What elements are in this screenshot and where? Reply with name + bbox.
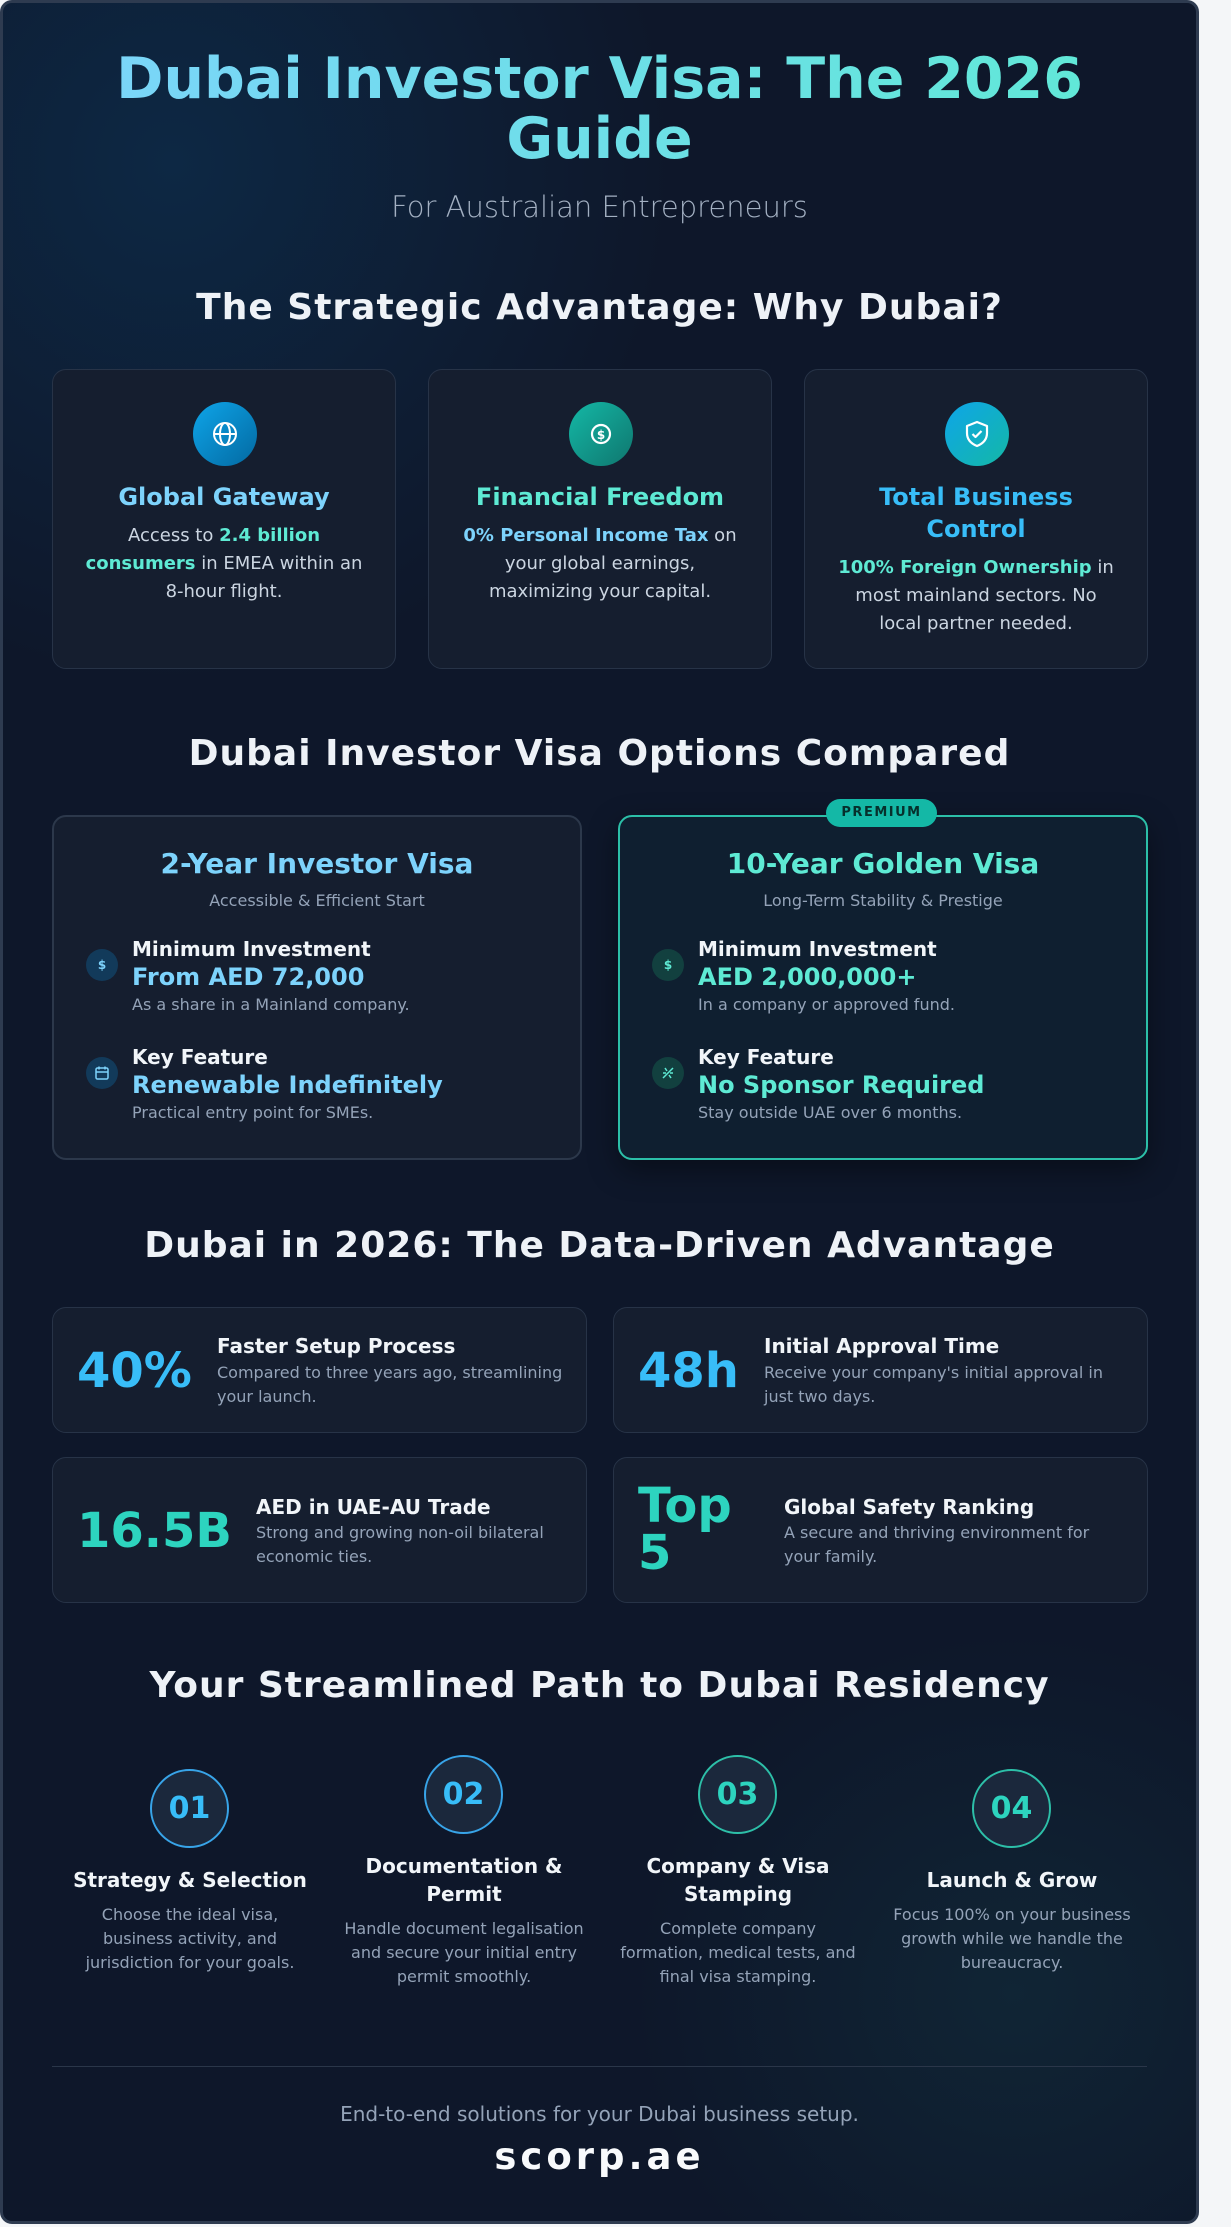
stat: top 5: Global Safety Ranking [784,1495,1034,1519]
panel: 2-year visa: Minimum Investment [132,937,371,961]
step 03: Stamping [684,1882,792,1906]
icon: coin [569,402,633,466]
panel: 10-year golden visa: No Sponsor Required [698,1071,984,1099]
title [3,49,1196,169]
stat: 16.5B: Strong and growing non-oil bilateral economic ties. [256,1523,544,1566]
stat: 48h [613,1307,1148,1433]
item: minimum investment [86,937,410,1014]
footer text: End-to-end solutions for your Dubai business setup. [340,2102,859,2126]
stat: 16.5B: 16.5B [77,1503,232,1559]
step 01 [73,1769,307,1972]
panel: 10-year golden visa: In a company or approved fund. [698,995,955,1014]
step 03: 03 [717,1777,758,1812]
panel: global gateway [52,369,396,669]
panel: 10-year golden visa [618,815,1148,1160]
step 02: Documentation & [366,1854,562,1878]
stat: 16.5B [52,1457,587,1603]
title: Guide [506,106,693,172]
visa subtitle: Accessible & Efficient Start [209,891,425,910]
heading: path to residency: Your Streamlined Path to Dubai Residency [149,1665,1050,1706]
stat: 48h: Initial Approval Time [764,1334,999,1358]
item: key feature [86,1045,443,1122]
heading: visa options: Dubai Investor Visa Options Compared [189,733,1010,774]
step 03: final visa stamping. [660,1967,816,1986]
step 03: formation, medical tests, and [620,1943,856,1962]
panel: 2-year visa: As a share in a Mainland company. [132,995,410,1014]
stat: 40%: 40% [77,1343,192,1399]
panel: 10-year golden visa: Stay outside UAE over 6 months. [698,1103,962,1122]
stat: 16.5B: AED in UAE-AU Trade [256,1495,491,1519]
panel: 2-year visa: Practical entry point for SMEs. [132,1103,373,1122]
card text: 0% Personal Income Tax on your global earnings, maximizing your capital. [463,525,737,602]
panel: 2-year visa: Key Feature [132,1045,268,1069]
panel: 10-year golden visa: Minimum Investment [698,937,937,961]
step 04: Launch & Grow [927,1868,1097,1892]
step 01: Strategy & Selection [73,1868,307,1892]
stat: 40%: Compared to three years ago, streamlining your launch. [217,1363,562,1406]
item: key feature [652,1045,984,1122]
stat: top 5: 5 [638,1525,671,1581]
footer brand: scorp.ae [494,2135,705,2178]
step 02 [344,1755,584,1986]
card title: Control [926,515,1026,543]
title: Dubai Investor Visa: The 2026 [116,46,1083,112]
card text: Access to 2.4 billion consumers in EMEA within an 8-hour flight. [86,525,362,602]
panel: 10-year golden visa: AED 2,000,000+ [698,963,916,991]
subtitle: For Australian Entrepreneurs [391,190,808,224]
icon: shield [945,402,1009,466]
stat: top 5: A secure and thriving environment for your family. [784,1523,1089,1566]
item: minimum investment [652,937,955,1014]
stat: 40% [52,1307,587,1433]
step 01: Choose the ideal visa, business activity, and jurisdiction for your goals. [86,1905,294,1972]
card title: Total Business [879,483,1073,511]
step 02: Permit [426,1882,502,1906]
badge: premium [826,799,937,827]
panel: 10-year golden visa: $ [664,958,672,972]
step 03: Company & Visa [646,1854,830,1878]
step 02: 02 [443,1777,484,1812]
step 03 [620,1755,856,1986]
panel: 10-year golden visa: Key Feature [698,1045,834,1069]
panel: 2-year visa [52,815,582,1160]
stat: 40%: Faster Setup Process [217,1334,455,1358]
icon: globe [193,402,257,466]
stat: 48h: Receive your company's initial approval in just two days. [764,1363,1103,1406]
step 01: 01 [169,1791,210,1826]
panel: 2-year visa: From AED 72,000 [132,963,364,991]
card title: Global Gateway [118,483,330,511]
step 04: 04 [991,1791,1032,1826]
panel: 2-year visa: $ [98,958,106,972]
stat: top 5: Top [638,1478,732,1534]
stat: top 5 [613,1457,1148,1603]
visa title: 10-Year Golden Visa [727,847,1039,880]
visa title: 2-Year Investor Visa [161,847,473,880]
step 02: Handle document legalisation and secure your initial entry permit smoothly. [344,1919,584,1986]
panel: 2-year visa: Renewable Indefinitely [132,1071,443,1099]
panel: financial freedom [428,369,772,669]
icon: coin: $ [597,428,605,442]
step 04 [893,1769,1131,1972]
card title: Financial Freedom [476,483,724,511]
step 03: Complete company [660,1919,816,1938]
visa subtitle: Long-Term Stability & Prestige [763,891,1003,910]
heading: strategic advantage: The Strategic Advantage: Why Dubai? [196,287,1003,328]
stat: 48h: 48h [638,1343,739,1399]
step 04: Focus 100% on your business growth while we handle the bureaucracy. [893,1905,1131,1972]
heading: data-driven: Dubai in 2026: The Data-Driven Advantage [144,1225,1055,1266]
panel: total business control [804,369,1148,669]
card text: 100% Foreign Ownership in most mainland sectors. No local partner needed. [838,557,1114,634]
card title [879,483,1073,543]
badge: premium: PREMIUM [841,805,922,820]
